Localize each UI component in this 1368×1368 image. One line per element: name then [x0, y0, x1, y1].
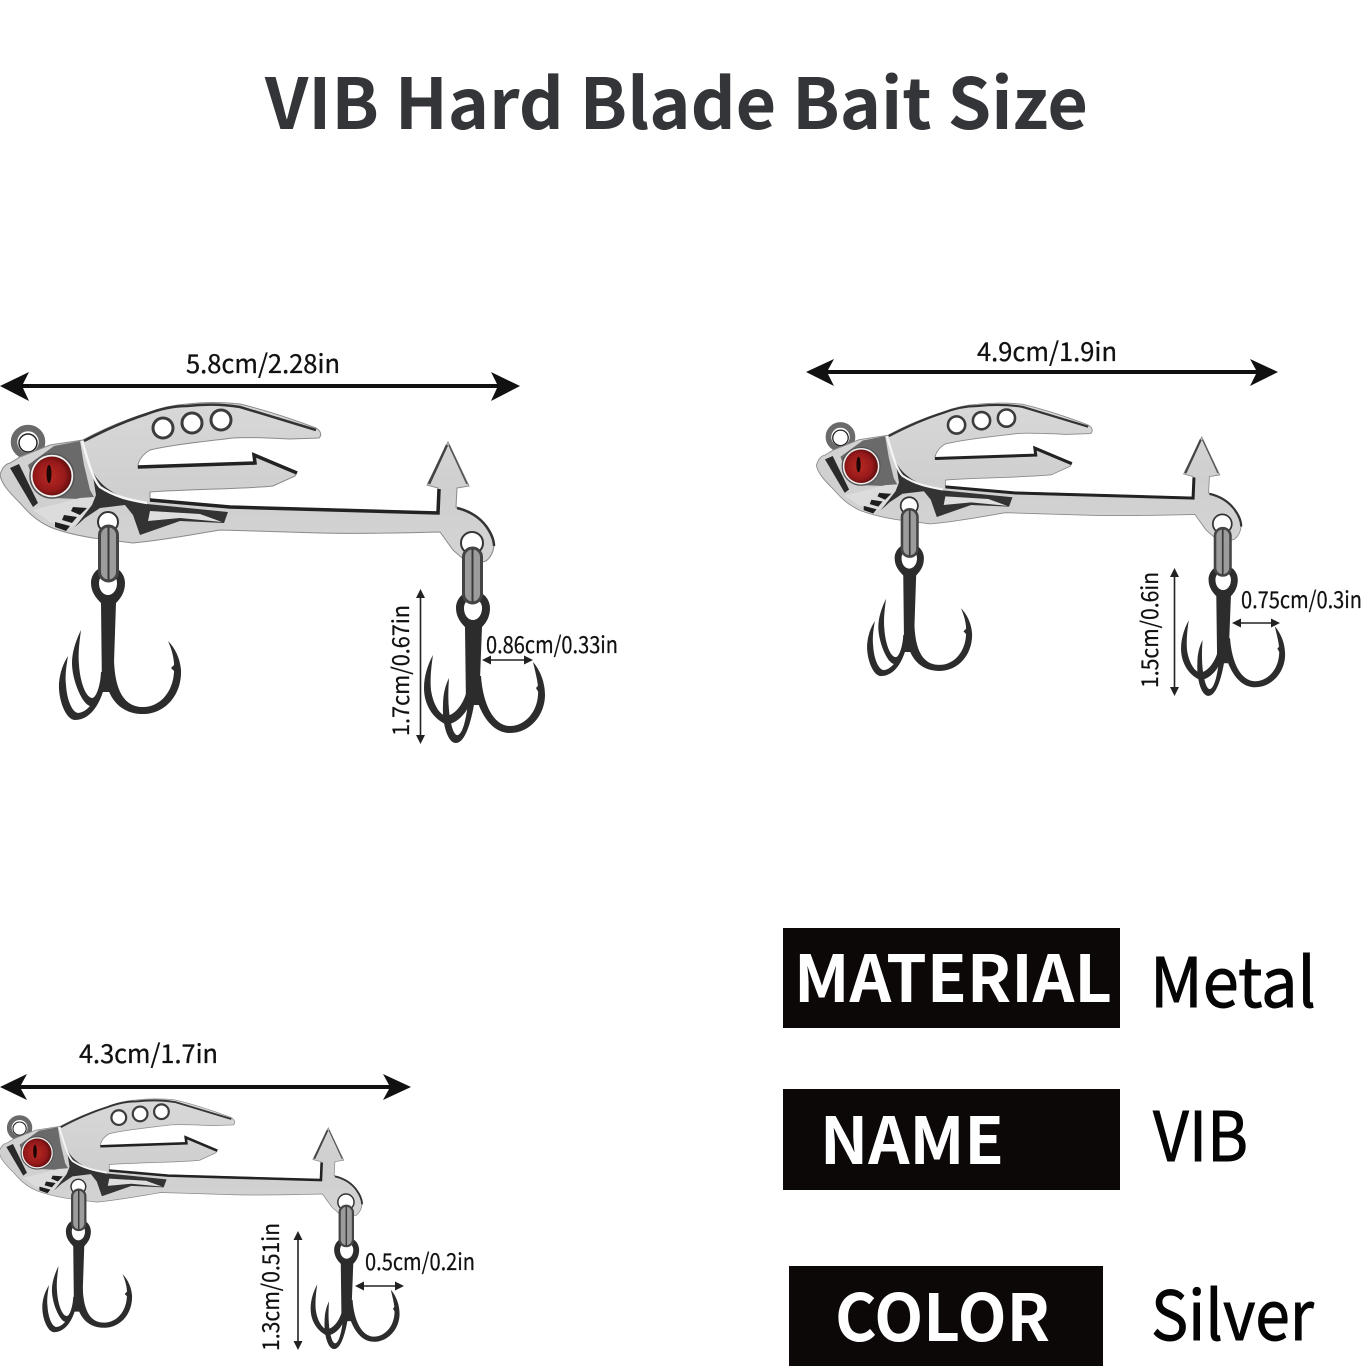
label: small overall length: 4.3cm/1.7in	[79, 1034, 218, 1071]
label: large hook width: 0.86cm/0.33in	[486, 626, 618, 660]
arrow: medium hook width	[1232, 618, 1280, 628]
tag: material	[783, 928, 1120, 1028]
label: medium hook height: 1.5cm/0.6in	[1131, 572, 1165, 688]
spec: name	[783, 1082, 1248, 1190]
spec: color	[789, 1261, 1315, 1366]
arrow: large hook height	[416, 589, 425, 744]
label: small hook width: 0.5cm/0.2in	[365, 1243, 475, 1277]
label: small hook height: 1.3cm/0.51in	[252, 1223, 286, 1351]
tag text: name: NAME	[820, 1089, 1004, 1183]
icon: large blade bait	[0, 402, 545, 743]
arrow: small overall length	[0, 1074, 411, 1100]
panel: small lure	[0, 1034, 475, 1351]
arrow: small hook width	[355, 1282, 404, 1290]
value: color: Silver	[1151, 1261, 1315, 1360]
title: VIB Hard Blade Bait Size	[264, 49, 1088, 150]
value: name: VIB	[1153, 1082, 1248, 1181]
tag text: material: MATERIAL	[794, 927, 1112, 1021]
icon: medium blade bait	[816, 403, 1285, 696]
arrow: medium overall length	[806, 359, 1278, 386]
panel: large lure	[0, 344, 618, 744]
tag: name	[783, 1089, 1120, 1190]
label: large hook height: 1.7cm/0.67in	[382, 605, 416, 736]
icon: small blade bait	[0, 1099, 400, 1349]
arrow: medium hook height	[1170, 568, 1179, 696]
arrow: small hook height	[294, 1231, 302, 1350]
arrow: large hook width	[482, 656, 533, 664]
tag: color	[789, 1266, 1103, 1366]
arrow: large overall length	[0, 372, 520, 401]
tag text: color: COLOR	[835, 1266, 1050, 1360]
label: medium overall length: 4.9cm/1.9in	[977, 332, 1117, 369]
panel: medium lure	[806, 332, 1362, 696]
value: material: Metal	[1150, 928, 1316, 1027]
label: large overall length: 5.8cm/2.28in	[186, 344, 340, 381]
spec: material	[783, 927, 1316, 1028]
